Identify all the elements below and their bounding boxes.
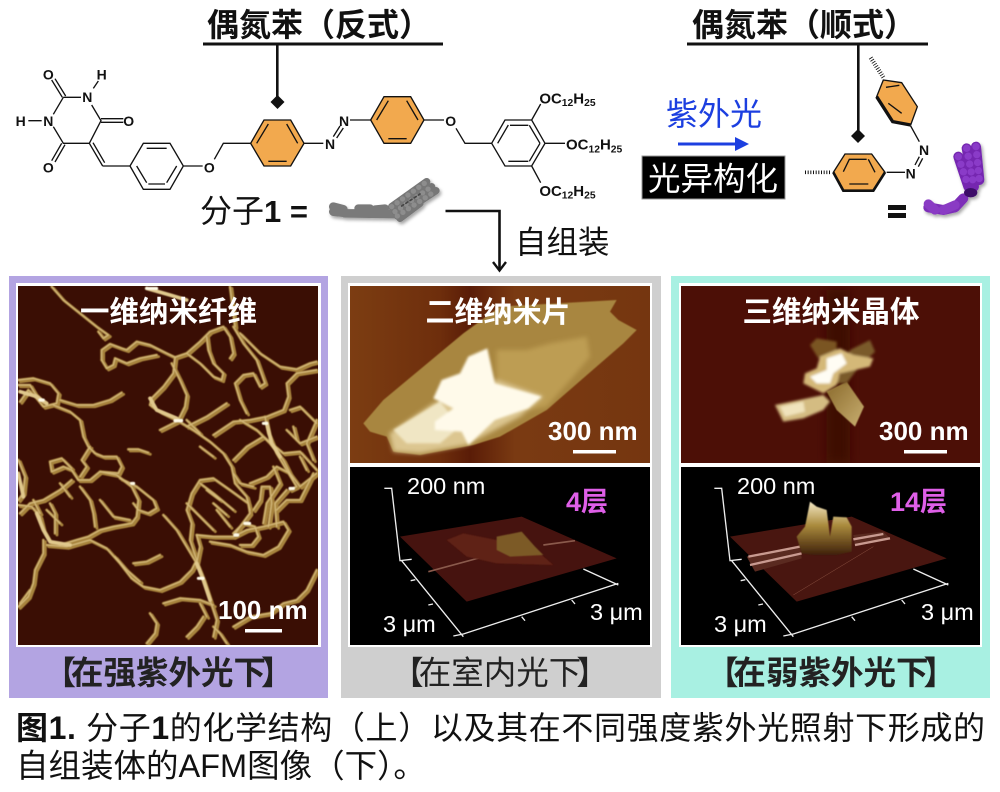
atom labels: H — [97, 66, 107, 82]
atom labels: N — [325, 136, 335, 152]
atom labels: N — [43, 113, 53, 129]
dodecyloxy chain labels: 25 — [584, 191, 596, 202]
atom labels: N — [339, 113, 349, 129]
scale label: 100 nm: 100 nm — [218, 595, 308, 625]
arrow: self-assembly — [446, 211, 610, 270]
AFM image: nanosheet 3D view: 4层 — [566, 487, 608, 517]
AFM image: nanosheet 3D view: 3 μm — [590, 599, 643, 625]
atom labels: O — [123, 113, 134, 129]
condition label: room light: 【在室内光下】 — [391, 655, 609, 691]
AFM image: nanocrystal 3D view: 200 nm — [737, 473, 815, 499]
heading: trans azobenzene — [203, 7, 443, 109]
arrow: UV light: 紫外光 — [666, 96, 762, 132]
AFM image: nanocrystal 3D view: 3 μm — [714, 611, 767, 637]
chemical structure: cis azobenzene — [805, 57, 929, 191]
figure caption: 图1. 分子1的化学结构（上）以及其在不同强度紫外光照射下形成的 — [16, 710, 985, 746]
dodecyloxy chain labels: 12 — [588, 144, 600, 155]
dodecyloxy chain labels: 12 — [562, 191, 574, 202]
heading: cis azobenzene: 偶氮苯（顺式） — [692, 7, 916, 43]
AFM image: nanocrystal 3D view: 3 μm — [921, 599, 974, 625]
atom labels: H — [16, 113, 26, 129]
atom labels — [16, 66, 456, 176]
condition label: weak UV: 【在弱紫外光下】 — [706, 655, 956, 691]
AFM image: nanocrystal 3D view — [681, 467, 980, 645]
dodecyloxy chain labels: 12 — [562, 98, 574, 109]
AFM image: nanofiber network — [18, 287, 319, 645]
heading: trans azobenzene: 偶氮苯（反式） — [207, 7, 431, 43]
atom labels: O — [204, 160, 215, 176]
panel: weak UV, 3D nanocrystals — [671, 276, 990, 698]
chemical structure: cis azobenzene: N — [919, 142, 929, 158]
dodecyloxy chain labels: OC — [566, 137, 588, 154]
heading: 3D nanocrystals: 三维纳米晶体 — [742, 296, 920, 329]
dodecyloxy chain labels — [539, 90, 623, 202]
label: molecule 1 with grey model — [200, 182, 436, 229]
scale label: 300 nm: 300 nm — [879, 416, 969, 446]
atom labels: O — [43, 160, 54, 176]
scale label: 300 nm: 300 nm — [548, 416, 638, 446]
figure caption: 自组装体的AFM图像（下）。 — [16, 748, 426, 784]
chemical structure: cis azobenzene: N — [906, 165, 916, 181]
atom labels: O — [445, 113, 456, 129]
molecule model: purple cis form — [928, 147, 979, 210]
orange azobenzene rings (trans) — [251, 97, 424, 166]
dodecyloxy chain labels: OC — [539, 183, 562, 200]
dodecyloxy chain labels: 25 — [584, 98, 596, 109]
AFM image: nanosheet 3D view — [350, 467, 650, 645]
arrow: self-assembly: 自组装 — [515, 224, 610, 260]
AFM image: nanosheet 3D view: 200 nm — [407, 473, 485, 499]
AFM image: nanosheet top view — [350, 286, 650, 463]
figure caption — [16, 710, 985, 784]
atom labels: O — [43, 66, 54, 82]
panel: room light, 2D nanosheets — [341, 276, 661, 698]
condition label: strong UV: 【在强紫外光下】 — [43, 655, 294, 691]
label: molecule 1 with grey model: 分子1 = — [200, 193, 308, 229]
heading: 2D nanosheets: 二维纳米片 — [425, 296, 571, 329]
dodecyloxy chain labels: H — [600, 137, 611, 154]
arrow: UV light — [666, 96, 762, 151]
heading: cis azobenzene — [687, 7, 928, 143]
label box: photoisomerization: 光异构化 — [648, 161, 778, 197]
dodecyloxy chain labels: H — [573, 183, 584, 200]
chemical structure: trans azobenzene molecule 1 — [16, 66, 623, 202]
AFM image: nanocrystal 3D view: 14层 — [890, 487, 947, 517]
bonds — [28, 79, 565, 189]
dodecyloxy chain labels: 25 — [611, 144, 623, 155]
dodecyloxy chain labels: H — [573, 90, 584, 107]
AFM image: nanosheet 3D view: 3 μm — [383, 611, 436, 637]
AFM image: nanocrystal top view — [681, 286, 980, 463]
equals sign: cis molecule — [888, 205, 906, 218]
heading: 1D nanofibers: 一维纳米纤维 — [80, 296, 257, 329]
panel: strong UV, 1D nanofibers — [9, 276, 328, 698]
atom labels: N — [82, 89, 92, 105]
dodecyloxy chain labels: OC — [539, 90, 562, 107]
